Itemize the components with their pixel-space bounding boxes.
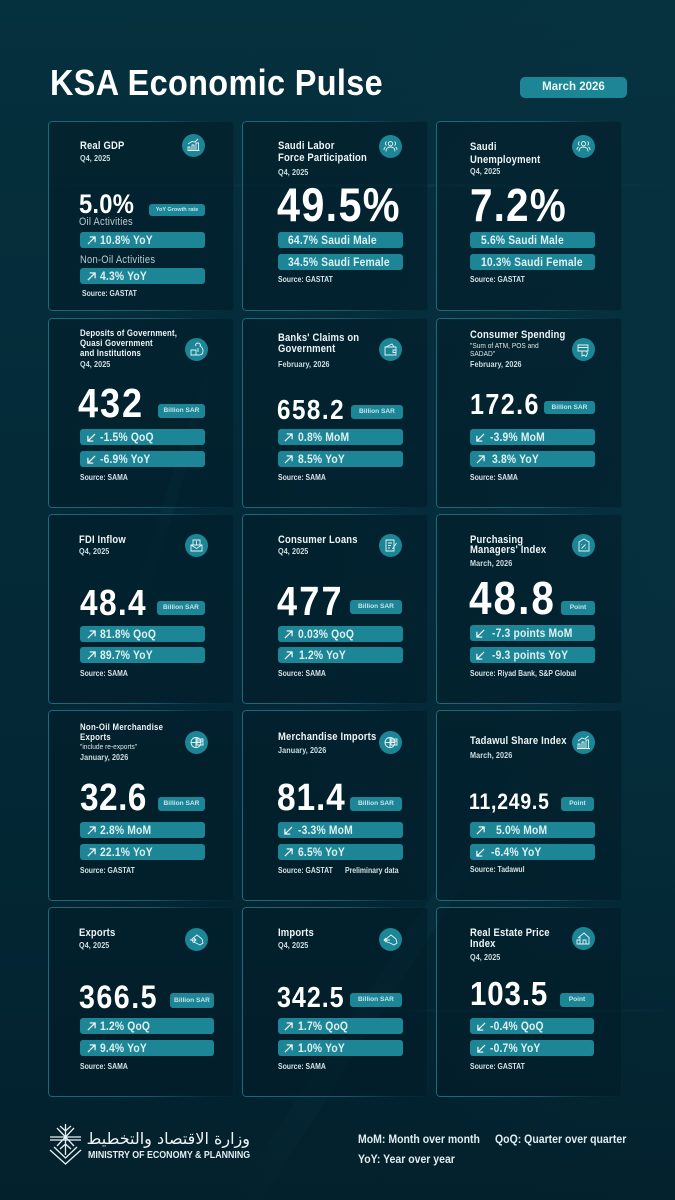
- unit badge: Point: [569, 800, 586, 807]
- panel: Imports: [242, 907, 428, 1097]
- panel: Non-Oil Merchandise Exports: [48, 710, 234, 901]
- stat: YoY: [80, 451, 205, 467]
- heading: Unemployment: [470, 154, 540, 166]
- unit badge: Point: [570, 604, 586, 611]
- heading: Merchandise Imports: [278, 731, 376, 743]
- heading: and Institutions: [80, 348, 141, 358]
- stat: MoM: [278, 822, 402, 838]
- ministry name: [87, 1129, 250, 1161]
- panel: Saudi Unemployment: [436, 121, 622, 311]
- stat: MoM: [470, 429, 594, 445]
- stat: YoY: -6.4% YoY: [490, 845, 541, 859]
- stat: QoQ: [80, 429, 205, 445]
- icon: ministry logo: [50, 1124, 82, 1165]
- icon: loan form: [379, 534, 402, 557]
- icon: index: [572, 534, 595, 557]
- heading: Government: [278, 343, 335, 355]
- heading: Quasi Government: [80, 338, 152, 348]
- stat: male: 5.6% Saudi Male: [480, 233, 563, 247]
- stat: MoM: -3.9% MoM: [490, 430, 544, 444]
- heading: [470, 926, 550, 950]
- unit badge: Billion SAR: [358, 996, 394, 1003]
- unit badge: Point: [569, 996, 585, 1003]
- source: Source: GASTAT: [80, 866, 134, 875]
- date: February, 2026: [470, 359, 522, 369]
- unit badge: Billion SAR: [164, 800, 199, 807]
- value: 49.5%: [277, 178, 401, 230]
- stat: YoY: 6.5% YoY: [298, 845, 344, 859]
- heading: Saudi: [470, 140, 497, 152]
- date: March, 2026: [470, 750, 512, 760]
- source: Source: Riyad Bank, S&P Global: [470, 669, 576, 678]
- date: January, 2026: [80, 752, 128, 762]
- heading: [278, 332, 359, 355]
- unit badge: [544, 401, 595, 414]
- stat: female: 34.5% Saudi Female: [288, 255, 389, 269]
- source: Source: SAMA: [80, 669, 127, 678]
- stat: YoY: [278, 1040, 402, 1056]
- note: preliminary: Preliminary data: [345, 866, 399, 875]
- icon: inflow: [185, 534, 208, 557]
- stat: YoY: 22.1% YoY: [100, 845, 153, 859]
- stat: QoQ: 1.7% QoQ: [298, 1019, 348, 1033]
- note: [470, 341, 539, 358]
- date: Q4, 2025: [79, 940, 109, 950]
- value: 432: [78, 380, 144, 426]
- panel: Real GDP: [48, 121, 234, 311]
- title: KSA Economic Pulse: [50, 62, 383, 102]
- legend: YoY: YoY: Year over year: [358, 1152, 455, 1166]
- value: 48.8: [469, 572, 556, 624]
- source: Source: Tadawul: [470, 865, 525, 874]
- unit badge: [351, 405, 403, 419]
- heading: [470, 140, 540, 166]
- icon: market chart: [572, 731, 595, 754]
- heading: Tadawul Share Index: [470, 735, 567, 747]
- stat: YoY: [470, 844, 594, 860]
- ministry name: English: MINISTRY OF ECONOMY & PLANNING: [88, 1150, 250, 1161]
- heading: [80, 328, 177, 358]
- unit badge: [561, 797, 594, 811]
- unit badge: [350, 993, 402, 1007]
- unit badge: Billion SAR: [359, 408, 395, 415]
- stat: female: 10.3% Saudi Female: [480, 254, 582, 268]
- heading: Force Participation: [278, 152, 366, 164]
- date: Q4, 2025: [80, 359, 110, 369]
- heading: [470, 534, 546, 556]
- source: Source: SAMA: [278, 473, 325, 482]
- stat: QoQ: 1.2% QoQ: [100, 1019, 150, 1033]
- stat: QoQ: [470, 1018, 594, 1034]
- ministry name: Arabic: وزارة الاقتصاد والتخطيط: [87, 1129, 250, 1148]
- date: Q4, 2025: [470, 952, 500, 962]
- stat: YoY: -0.7% YoY: [490, 1041, 540, 1055]
- panel: FDI Inflow: [48, 514, 234, 704]
- stat: MoM: 2.8% MoM: [100, 823, 151, 837]
- heading: Exports: [79, 927, 115, 939]
- note: "include re-exports": [80, 742, 137, 751]
- date badge: March 2026: [542, 81, 605, 93]
- heading: [278, 140, 366, 164]
- heading: Real Estate Price: [470, 926, 550, 938]
- label: non-oil: Non-Oil Activities: [80, 254, 155, 266]
- stat: YoY: [278, 844, 402, 860]
- stat: non-oil growth: 4.3% YoY: [100, 269, 147, 283]
- unit badge: Billion SAR: [163, 604, 199, 611]
- panel: Consumer Loans: [242, 514, 428, 704]
- source: Source: SAMA: [80, 1062, 127, 1071]
- value: 103.5: [470, 976, 548, 1013]
- icon: people: [379, 135, 402, 158]
- value: 7.2%: [470, 179, 567, 231]
- panel: Purchasing Managers' Index: [436, 514, 622, 704]
- stat: YoY: 8.5% YoY: [298, 452, 344, 466]
- source: Source: GASTAT: [470, 275, 525, 284]
- panel: Banks' Claims on Government: [242, 318, 428, 508]
- date: Q4, 2025: [278, 167, 308, 177]
- stat: YoY: [470, 451, 594, 467]
- stat: MoM: [278, 429, 402, 445]
- panel: Exports: [48, 907, 234, 1097]
- heading: Exports: [80, 732, 110, 742]
- panel: Consumer Spending: [436, 318, 622, 508]
- date: February, 2026: [278, 359, 329, 369]
- icon: growth chart: [182, 134, 205, 157]
- date: January, 2026: [278, 745, 326, 755]
- date: March, 2026: [470, 558, 512, 568]
- stat: YoY: [470, 647, 594, 663]
- heading: [80, 722, 163, 742]
- unit badge: Billion SAR: [552, 404, 587, 411]
- heading: Consumer Loans: [278, 534, 357, 546]
- heading: Index: [470, 938, 496, 950]
- stat: YoY: 9.4% YoY: [100, 1041, 147, 1055]
- heading: Saudi Labor: [278, 140, 334, 152]
- panel: Deposits: [48, 318, 234, 508]
- stat: non-oil growth: [80, 268, 205, 284]
- stat: YoY: -9.3 points YoY: [492, 648, 568, 662]
- stat: QoQ: [80, 626, 205, 642]
- value: 81.4: [276, 777, 345, 819]
- date badge: [520, 77, 627, 98]
- note: SADAD": [470, 349, 495, 358]
- stat: YoY: [80, 1040, 214, 1056]
- unit badge: [158, 797, 205, 811]
- icon: import: [379, 731, 402, 754]
- icon: export: [185, 731, 208, 754]
- label: oil: Oil Activities: [79, 216, 133, 228]
- source: Source: SAMA: [278, 1062, 325, 1071]
- heading: Real GDP: [80, 140, 124, 152]
- stat: MoM: -3.3% MoM: [298, 823, 352, 837]
- date: Q4, 2025: [79, 546, 109, 556]
- date: Q4, 2025: [278, 546, 308, 556]
- stat: oil growth: [80, 232, 205, 248]
- stat: MoM: -7.3 points MoM: [492, 626, 572, 640]
- value: 48.4: [80, 582, 146, 622]
- stat: male: [278, 232, 402, 248]
- stat: MoM: [470, 625, 594, 641]
- icon: wallet: [379, 338, 402, 361]
- stat: QoQ: 0.03% QoQ: [298, 627, 354, 641]
- icon: map export: [185, 928, 208, 951]
- stat: oil growth: 10.8% YoY: [100, 233, 153, 247]
- unit badge: Billion SAR: [358, 800, 394, 807]
- stat: YoY: 1.0% YoY: [298, 1041, 344, 1055]
- legend: MoM: MoM: Month over month: [358, 1132, 480, 1146]
- stat: YoY: 89.7% YoY: [100, 648, 153, 662]
- stat: male: 64.7% Saudi Male: [288, 233, 376, 247]
- heading: Managers' Index: [470, 544, 546, 556]
- stat: MoM: 5.0% MoM: [496, 823, 547, 837]
- stat: YoY: 3.8% YoY: [492, 452, 538, 466]
- stat: QoQ: -1.5% QoQ: [100, 430, 154, 444]
- stat: YoY: [278, 647, 402, 663]
- unit badge: [157, 601, 205, 615]
- value: 11,249.5: [469, 788, 550, 814]
- heading: Imports: [278, 927, 313, 939]
- note: "Sum of ATM, POS and: [470, 341, 539, 350]
- heading: Non-Oil Merchandise: [80, 722, 163, 732]
- icon: card: [572, 338, 595, 361]
- value: 5.0%: [79, 188, 134, 218]
- unit badge: Billion SAR: [164, 407, 199, 414]
- unit badge: [350, 797, 402, 811]
- icon: house: [572, 927, 595, 950]
- stat: MoM: [80, 822, 205, 838]
- icon: map import: [379, 928, 402, 951]
- stat: MoM: 0.8% MoM: [298, 430, 349, 444]
- unit badge: [560, 993, 594, 1007]
- unit badge: Billion SAR: [174, 997, 210, 1004]
- heading: Banks' Claims on: [278, 332, 359, 344]
- source: Source: SAMA: [470, 473, 518, 482]
- stat: YoY: [470, 1040, 594, 1056]
- panel: Merchandise Imports: [242, 710, 428, 901]
- stat: YoY: -6.9% YoY: [100, 452, 150, 466]
- value: 172.6: [470, 389, 540, 421]
- value: 342.5: [276, 982, 344, 1014]
- stat: male: [470, 232, 594, 248]
- date: Q4, 2025: [278, 940, 308, 950]
- stat: QoQ: 81.8% QoQ: [100, 627, 156, 641]
- value: 477: [277, 578, 344, 624]
- unit badge: [170, 993, 214, 1008]
- source: Source: SAMA: [278, 669, 325, 678]
- unit badge: YoY Growth rate: [156, 207, 198, 213]
- stat: MoM: [470, 822, 594, 838]
- source: Source: GASTAT: [278, 275, 332, 284]
- date: Q4, 2025: [80, 153, 110, 163]
- unit badge: Billion SAR: [358, 603, 394, 610]
- icon: people: [572, 135, 595, 158]
- stat: QoQ: [278, 1018, 402, 1034]
- heading: Purchasing: [470, 534, 523, 546]
- stat: QoQ: [278, 626, 402, 642]
- panel: Tadawul Share Index: [436, 710, 622, 901]
- source: Source: GASTAT: [82, 289, 137, 298]
- date: Q4, 2025: [470, 166, 500, 176]
- stat: YoY: [278, 451, 402, 467]
- unit badge: [149, 204, 205, 216]
- heading: Deposits of Government,: [80, 328, 177, 338]
- icon: deposit: [185, 338, 208, 361]
- heading: Consumer Spending: [470, 329, 565, 341]
- source: Source: GASTAT: [470, 1062, 525, 1071]
- unit badge: [158, 404, 205, 418]
- source: Source: SAMA: [80, 473, 127, 482]
- unit badge: [350, 600, 402, 614]
- stat: YoY: 1.2% YoY: [298, 648, 345, 662]
- panel: Saudi Labor Force Participation: [242, 121, 428, 311]
- stat: QoQ: [80, 1018, 214, 1034]
- stat: YoY: [80, 844, 205, 860]
- heading: FDI Inflow: [79, 534, 126, 546]
- legend: QoQ: QoQ: Quarter over quarter: [494, 1132, 626, 1146]
- legend: abbreviations: [358, 1132, 626, 1166]
- value: 366.5: [79, 978, 158, 1014]
- value: 658.2: [276, 394, 345, 424]
- unit badge: [561, 601, 595, 615]
- source: Source: GASTAT: [278, 866, 332, 875]
- panel: Real Estate Price Index: [436, 907, 622, 1097]
- value: 32.6: [80, 776, 146, 818]
- stat: QoQ: -0.4% QoQ: [490, 1019, 544, 1033]
- stat: YoY: [80, 647, 205, 663]
